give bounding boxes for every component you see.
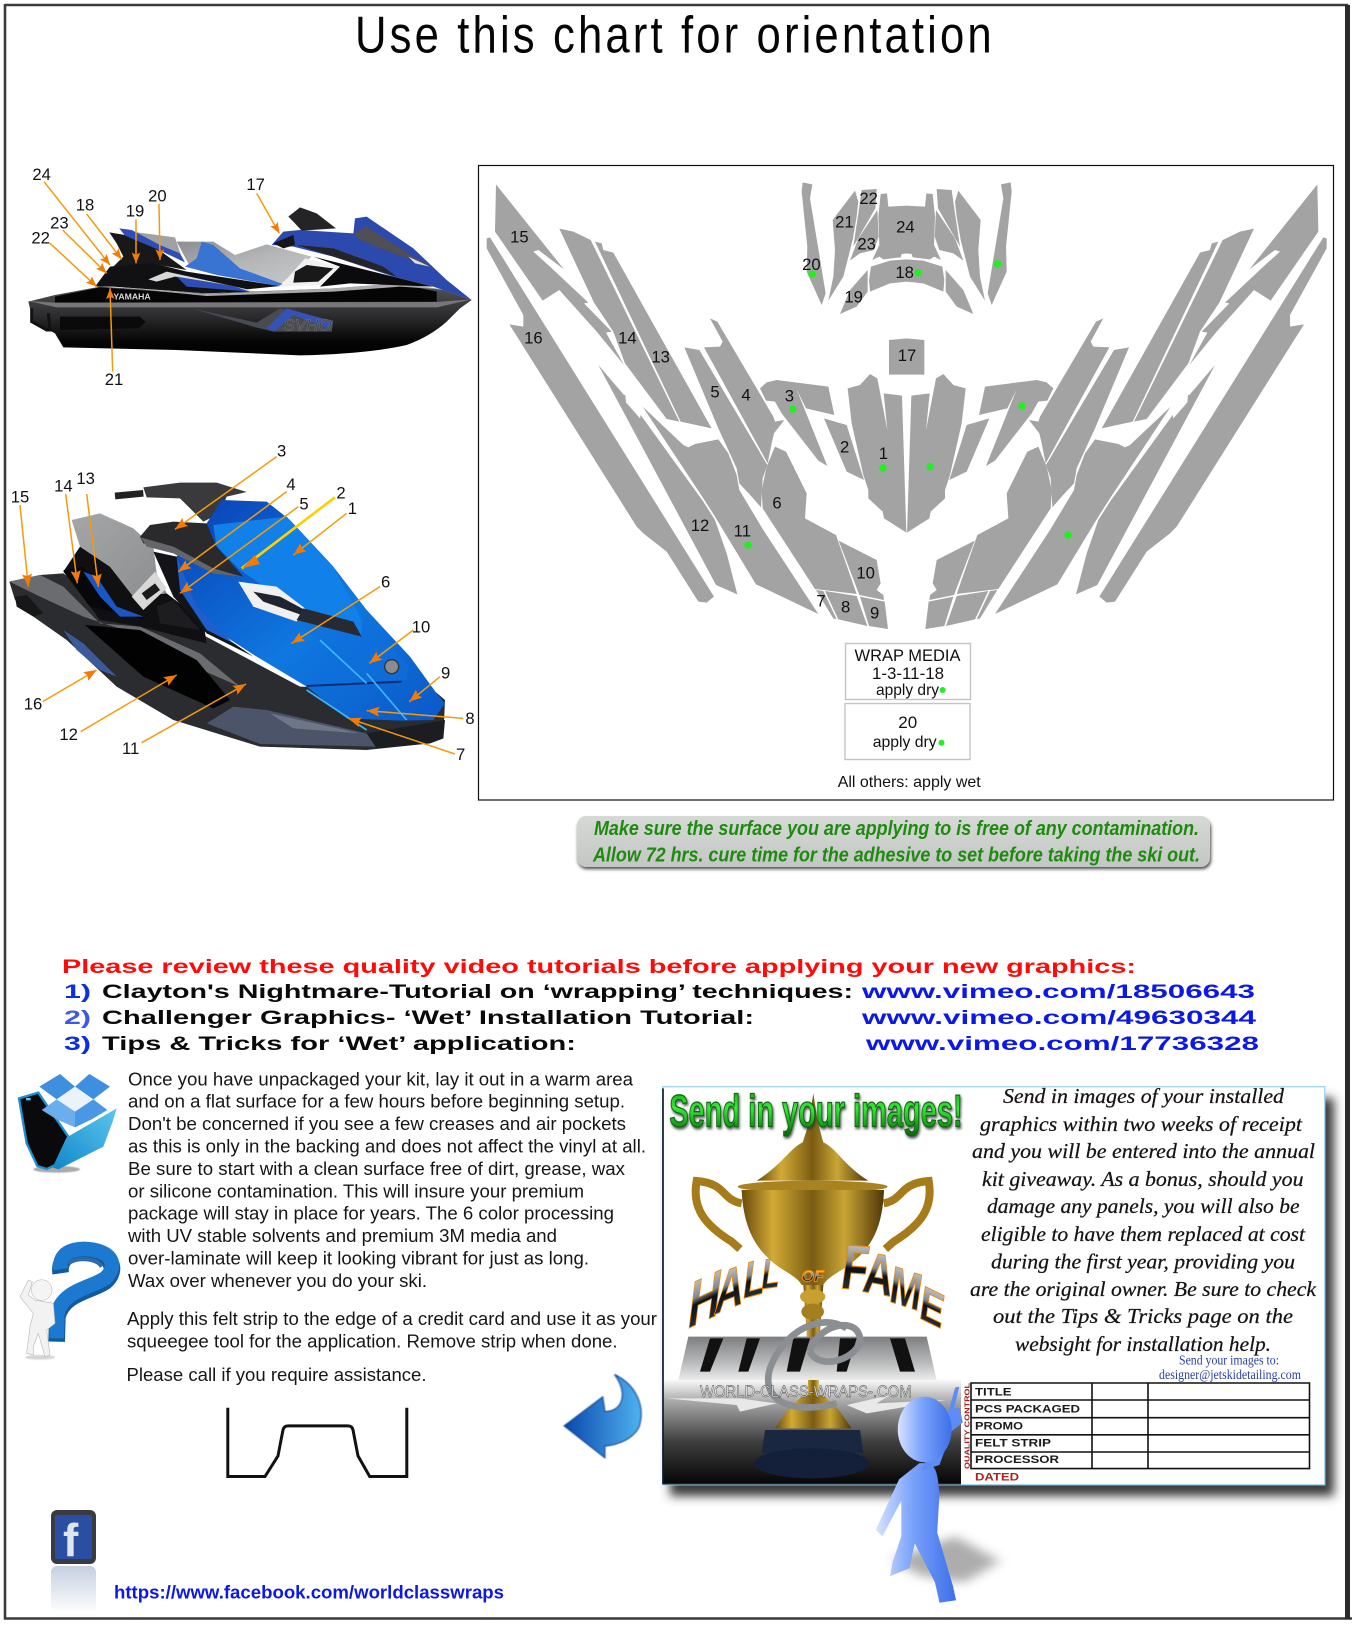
piece numbers: 7 <box>816 592 826 611</box>
callout 23 <box>50 213 107 273</box>
callout 21: 21 <box>105 370 123 389</box>
piece numbers: 24 <box>896 217 915 236</box>
front view yamaha emblem <box>385 660 399 674</box>
callout 1: 1 <box>348 499 357 518</box>
callout 6 <box>292 572 390 643</box>
callout 2 <box>242 483 346 568</box>
card background <box>663 1087 1325 1485</box>
callout 17 <box>246 175 279 233</box>
text block: giveaway details: are the original owner. Be sure to check <box>970 1277 1316 1301</box>
quality control table: PROMO <box>975 1420 1024 1432</box>
tutorial 1 <box>64 982 1255 1003</box>
wcw logo letters <box>678 1337 937 1380</box>
front view rear graphic <box>63 630 117 677</box>
icon: facebook <box>51 1510 96 1614</box>
callout 19: 19 <box>126 202 144 221</box>
text block: giveaway details: out the Tips & Tricks page on the <box>993 1304 1293 1328</box>
callout 9: 9 <box>441 663 450 682</box>
front view blue hood <box>173 500 445 721</box>
text block: assistance note: Please call if you require assistance. <box>126 1364 426 1385</box>
piece numbers: 23 <box>857 234 876 253</box>
text block: felt strip instructions: squeegee tool for the application. Remove strip when done. <box>127 1330 618 1351</box>
piece numbers: 2 <box>840 438 849 457</box>
hall of fame lettering: F <box>842 1230 870 1304</box>
callout 24: 24 <box>32 165 51 184</box>
tutorial 2: www.vimeo.com/49630344 <box>860 1008 1257 1029</box>
text block: setup instructions: and on a flat surface for a few hours before beginning setup. <box>128 1091 625 1112</box>
left half vinyl pieces <box>487 182 907 629</box>
tutorial 3: Tips & Tricks for ‘Wet’ application: <box>102 1034 576 1055</box>
panel: send in your images card <box>663 1084 1334 1496</box>
front view visor <box>140 522 243 577</box>
text block: giveaway details: kit giveaway. As a bonus, should you <box>982 1167 1304 1191</box>
quality control table: PROCESSOR <box>975 1454 1059 1466</box>
callout 18: 18 <box>76 196 94 215</box>
callout 15: 15 <box>11 487 29 506</box>
callout 1 <box>293 499 357 555</box>
side view hull <box>28 283 472 355</box>
green apply-dry dots <box>744 260 1072 549</box>
text block: setup instructions: over-laminate will keep it looking vibrant for just as long. <box>128 1248 589 1268</box>
callout 6: 6 <box>381 572 390 591</box>
trophy bowl <box>742 1190 884 1285</box>
callout banner: surface preparation: Allow 72 hrs. cure time for the adhesive to set before taking the ski out. <box>592 844 1200 866</box>
callout 11: 11 <box>122 739 139 758</box>
text block: setup instructions: Be sure to start with a clean surface free of dirt, grease, wax <box>128 1158 625 1179</box>
blue pointing figure <box>876 1387 1000 1603</box>
side view handlebar <box>288 207 336 231</box>
piece numbers <box>510 189 916 622</box>
callout 9 <box>409 663 450 702</box>
hall of fame lettering: L <box>762 1248 779 1298</box>
trophy artwork <box>663 1085 963 1484</box>
callout 23: 23 <box>50 213 69 232</box>
quality control table <box>962 1383 1310 1483</box>
piece numbers: 10 <box>856 563 875 582</box>
callout 19 <box>126 202 144 263</box>
piece numbers: 6 <box>772 493 782 512</box>
text block: setup instructions: Once you have unpackaged your kit, lay it out in a warm area <box>128 1068 634 1089</box>
piece numbers: 1 <box>879 444 888 463</box>
text block: setup instructions: with UV stable solvents and premium 3M media and <box>127 1225 557 1246</box>
callout 17: 17 <box>246 175 265 194</box>
callout 16 <box>24 670 97 713</box>
text block: felt strip instructions: Apply this felt strip to the edge of a credit card and use it as your <box>127 1308 657 1329</box>
quality control table: DATED <box>975 1471 1019 1483</box>
hall of fame lettering: M <box>890 1254 922 1323</box>
callout 8 <box>367 709 475 728</box>
text block: felt strip instructions <box>127 1308 657 1351</box>
callout 22 <box>31 228 97 287</box>
hall of fame lettering: OF <box>802 1269 825 1286</box>
icon: dropbox folder <box>19 1074 117 1173</box>
text block: setup instructions: Don't be concerned if you see a few creases and air pockets <box>128 1113 626 1134</box>
jet ski side view with numbered callouts <box>28 165 472 389</box>
piece numbers: 21 <box>835 213 854 232</box>
piece numbers: 18 <box>895 263 914 282</box>
text block: setup instructions: Wax over whenever you do your ski. <box>128 1270 427 1291</box>
callout banner: surface preparation <box>577 816 1211 869</box>
legend: wrap media <box>846 644 970 700</box>
piece numbers: 8 <box>841 598 850 617</box>
video tutorials list <box>62 957 1259 1055</box>
world class wraps wordmark: WORLD-CLASS-WRAPS-.COM <box>700 1382 912 1401</box>
piece numbers: 17 <box>898 346 916 365</box>
legend: wrap media: 1-3-11-18 <box>872 664 944 683</box>
facebook link: https://www.facebook.com/worldclasswraps <box>114 1583 504 1603</box>
callout banner: surface preparation: Make sure the surface you are applying to is free of any contamination. <box>594 818 1199 840</box>
trophy lid <box>757 1093 868 1181</box>
card shadow <box>670 1098 1334 1496</box>
text block: giveaway details: damage any panels, you will also be <box>987 1194 1300 1218</box>
piece numbers: 19 <box>844 288 863 307</box>
piece numbers: 14 <box>618 328 637 347</box>
tutorial 2 <box>64 1008 1257 1029</box>
figure shadow <box>892 1536 1000 1582</box>
text block: giveaway details: and you will be entered into the annual <box>972 1139 1315 1163</box>
callout 5: 5 <box>299 494 309 513</box>
text block: setup instructions <box>127 1068 646 1291</box>
right half vinyl pieces <box>906 182 1327 629</box>
piece numbers: 16 <box>524 328 543 347</box>
side view blue hood <box>272 217 472 300</box>
jet ski side view with numbered callouts: SVHO <box>283 318 332 335</box>
callout 13 <box>76 469 98 587</box>
side view seat <box>177 242 312 285</box>
callout 7: 7 <box>456 745 465 764</box>
piece numbers: 13 <box>651 347 670 366</box>
front view hull <box>9 573 445 750</box>
text block: giveaway details: websight for installation help. <box>1015 1332 1271 1356</box>
tutorial 2: 2) <box>64 1008 91 1029</box>
trophy foot <box>775 1395 852 1428</box>
hall of fame lettering: A <box>862 1238 893 1310</box>
icon: question mark figure <box>20 1249 112 1360</box>
callout 7 <box>348 718 465 764</box>
callout 4: 4 <box>286 475 296 494</box>
callout 20: 20 <box>148 187 167 206</box>
front view bow trim <box>207 707 377 747</box>
piece numbers: 22 <box>859 189 878 208</box>
title: Use this chart for orientation <box>355 7 992 64</box>
front view hood vent <box>238 582 305 622</box>
tutorial 2: Challenger Graphics- ‘Wet’ Installation Tutorial: <box>102 1008 754 1029</box>
callout 15 <box>11 487 29 587</box>
side view deck and rear <box>95 262 280 293</box>
piece numbers: 3 <box>785 387 794 406</box>
legend: wrap media: WRAP MEDIA <box>854 646 961 665</box>
text block: setup instructions: or silicone contamination. This will insure your premium <box>128 1180 584 1201</box>
callout 24 <box>32 165 110 265</box>
quality control table: PCS PACKAGED <box>975 1404 1080 1416</box>
script c swoosh <box>768 1322 860 1407</box>
trophy handles <box>696 1181 742 1249</box>
text block: giveaway details: eligible to have them replaced at cost <box>981 1222 1306 1246</box>
callout 13: 13 <box>76 469 95 488</box>
send images contact <box>1159 1353 1301 1382</box>
figure head <box>898 1397 952 1462</box>
tutorial 3: 3) <box>64 1034 91 1055</box>
felt strip outline diagram <box>228 1408 407 1476</box>
piece numbers: 12 <box>691 516 709 535</box>
piece numbers: 9 <box>870 603 879 622</box>
callout 8: 8 <box>465 709 475 728</box>
send in your images heading: Send in your images! <box>669 1085 963 1136</box>
quality control table: TITLE <box>975 1387 1012 1399</box>
callout 20 <box>148 187 167 260</box>
text block: giveaway details: Send in images of your installed <box>1003 1084 1284 1108</box>
text block: giveaway details: graphics within two weeks of receipt <box>980 1112 1303 1136</box>
yamaha logo: YAMAHA <box>113 293 151 302</box>
callout 11 <box>122 684 246 758</box>
callout 21 <box>105 288 123 389</box>
facebook tile: f <box>63 1514 79 1566</box>
callout 10 <box>369 617 430 663</box>
piece numbers: 4 <box>741 386 751 405</box>
legend: all others: All others: apply wet <box>838 774 981 791</box>
callout 3: 3 <box>277 442 286 461</box>
trophy stem <box>803 1285 823 1395</box>
tutorial 3 <box>64 1034 1259 1055</box>
side view console panel <box>280 258 340 287</box>
piece numbers: 5 <box>710 382 720 401</box>
tutorials heading: Please review these quality video tutorials before applying your new graphics: <box>62 957 1136 978</box>
callout 14 <box>54 477 77 583</box>
front view seat <box>72 513 167 597</box>
front view side panel <box>85 625 230 708</box>
text block: giveaway details: during the first year, providing you <box>991 1250 1295 1274</box>
piece numbers: 15 <box>510 228 529 247</box>
tutorial 3: www.vimeo.com/17736328 <box>864 1034 1259 1055</box>
piece numbers: 11 <box>734 522 751 541</box>
text block: setup instructions: package will stay in place for years. The 6 color processing <box>128 1203 614 1224</box>
callout 14: 14 <box>54 477 73 496</box>
legend: piece 20 <box>845 704 970 760</box>
callout 10: 10 <box>412 617 430 636</box>
tutorial 1: www.vimeo.com/18506643 <box>860 982 1255 1003</box>
hall of fame lettering: H <box>688 1256 721 1342</box>
callout 2: 2 <box>336 483 346 502</box>
callout 12 <box>59 675 177 744</box>
callout 3 <box>175 442 286 529</box>
send images contact: Send your images to: <box>1179 1353 1279 1368</box>
text block: setup instructions: as this is only in the backing and does not affect the vinyl at all. <box>128 1136 646 1156</box>
callout 22: 22 <box>31 228 50 247</box>
chart frame <box>478 166 1334 800</box>
hall of fame lettering <box>688 1230 944 1342</box>
hall of fame lettering: A <box>713 1252 744 1327</box>
floor gradient <box>663 1378 961 1484</box>
hall of fame lettering: E <box>920 1274 944 1341</box>
callout 5 <box>180 494 309 593</box>
text block: giveaway details <box>970 1084 1316 1356</box>
piece numbers: 20 <box>802 255 821 274</box>
figure raised arm <box>922 1387 963 1470</box>
callout 4 <box>178 475 296 572</box>
figure body <box>876 1463 956 1603</box>
lightning streaks <box>667 1398 777 1412</box>
facebook tile reflection <box>51 1566 96 1614</box>
quality control table: FELT STRIP <box>975 1438 1051 1450</box>
callout 16: 16 <box>24 694 42 713</box>
send images contact: designer@jetskidetailing.com <box>1159 1367 1301 1382</box>
legend: wrap media: apply dry <box>876 682 939 699</box>
quality control table: QUALITY CONTROL <box>962 1383 972 1469</box>
callout 12: 12 <box>59 725 78 744</box>
front view deck backing <box>63 547 207 643</box>
icon: blue curved arrow <box>564 1375 641 1458</box>
legend: piece 20: apply dry <box>873 734 937 751</box>
panel: wrap layout chart <box>478 166 1334 800</box>
callout 18 <box>76 196 122 259</box>
legend: piece 20: 20 <box>898 713 917 732</box>
jet ski front three-quarter view with numbered callouts <box>9 442 475 764</box>
hall of fame lettering: L <box>743 1248 765 1310</box>
tutorial 1: Clayton's Nightmare-Tutorial on ‘wrapping’ techniques: <box>102 982 853 1003</box>
front view handlebar <box>115 493 143 496</box>
tutorial 1: 1) <box>64 982 91 1003</box>
